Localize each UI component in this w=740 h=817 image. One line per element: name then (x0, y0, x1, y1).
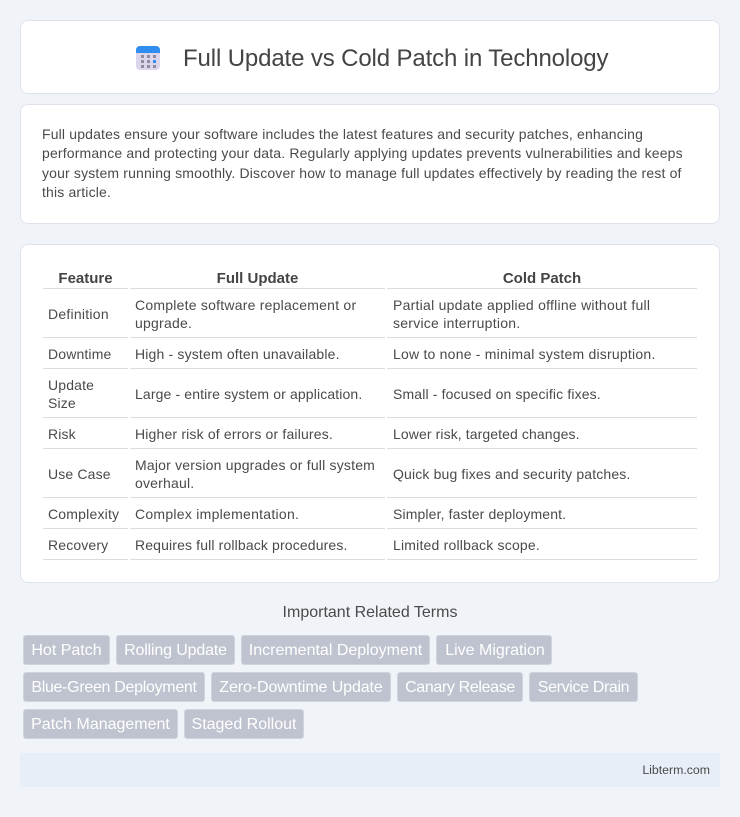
row: Risk: Risk (48, 426, 76, 442)
panel: comparison table: Simpler, faster deployment. (393, 506, 566, 522)
tag (241, 635, 430, 665)
panel: comparison table: Small - focused on specific fixes. (393, 386, 601, 402)
tag (23, 672, 205, 702)
tag (184, 709, 304, 739)
header panel (20, 20, 720, 94)
tag (23, 709, 178, 739)
panel: comparison table: Lower risk, targeted changes. (393, 426, 580, 442)
panel: comparison table: Quick bug fixes and security patches. (393, 466, 630, 482)
tag (211, 672, 391, 702)
panel: comparison table: Major version upgrades or full system (135, 457, 375, 473)
tag (436, 635, 552, 665)
tag (529, 672, 638, 702)
row: Recovery: Recovery (48, 537, 108, 553)
tag: Staged Rollout (192, 716, 296, 733)
panel: comparison table: Large - entire system or application. (135, 386, 362, 402)
tag: Rolling Update (124, 642, 227, 659)
tag: Zero-Downtime Update (219, 679, 383, 696)
table header: Cold Patch: Cold Patch (503, 270, 581, 287)
intro panel (20, 104, 720, 224)
panel: comparison table (20, 244, 720, 583)
table header: Full Update: Full Update (217, 270, 298, 287)
tag: Incremental Deployment (249, 642, 422, 659)
panel: comparison table: Low to none - minimal system disruption. (393, 346, 655, 362)
intro text: performance and protecting your data. Regularly applying updates prevents vulnerabilities and keeps (42, 145, 683, 161)
panel: comparison table: service interruption. (393, 315, 520, 331)
panel: comparison table: overhaul. (135, 475, 194, 491)
panel: comparison table: High - system often unavailable. (135, 346, 340, 362)
footer brand: Libterm.com (642, 763, 710, 777)
title: Full Update vs Cold Patch in Technology (183, 45, 608, 72)
table header: Feature: Feature (58, 270, 113, 287)
row: Use Case: Use Case (48, 466, 111, 482)
intro text: Full updates ensure your software includes the latest features and security patches, enhancing (42, 126, 643, 142)
intro text: this article. (42, 184, 111, 200)
footer bar (20, 753, 720, 787)
related terms heading: Important Related Terms (283, 604, 457, 621)
intro text (42, 126, 683, 200)
panel: comparison table: Partial update applied offline without full (393, 297, 650, 313)
row: Complexity: Complexity (48, 506, 119, 522)
tag (116, 635, 235, 665)
row: Update Size: Size (48, 395, 76, 411)
row: Downtime: Downtime (48, 346, 111, 362)
row: Update Size (48, 377, 94, 411)
tag: Hot Patch (31, 642, 102, 659)
panel: comparison table: Limited rollback scope. (393, 537, 540, 553)
tag: Blue-Green Deployment (31, 679, 197, 696)
tag: Canary Release (405, 679, 515, 696)
tag: Live Migration (445, 642, 545, 659)
icon: calendar (136, 46, 160, 70)
panel: comparison table: Complex implementation. (135, 506, 299, 522)
panel: comparison table: Requires full rollback procedures. (135, 537, 348, 553)
tag (23, 635, 110, 665)
panel: comparison table: Higher risk of errors or failures. (135, 426, 333, 442)
row: Definition: Definition (48, 306, 109, 322)
intro text: your system running smoothly. Discover how to manage full updates effectively by reading the rest of (42, 165, 682, 181)
tag (397, 672, 523, 702)
row: Update Size: Update (48, 377, 94, 393)
tag: Patch Management (31, 716, 170, 733)
panel: comparison table: upgrade. (135, 315, 192, 331)
related terms tags (23, 635, 638, 739)
tag: Service Drain (538, 679, 629, 696)
panel: comparison table: Complete software replacement or (135, 297, 356, 313)
